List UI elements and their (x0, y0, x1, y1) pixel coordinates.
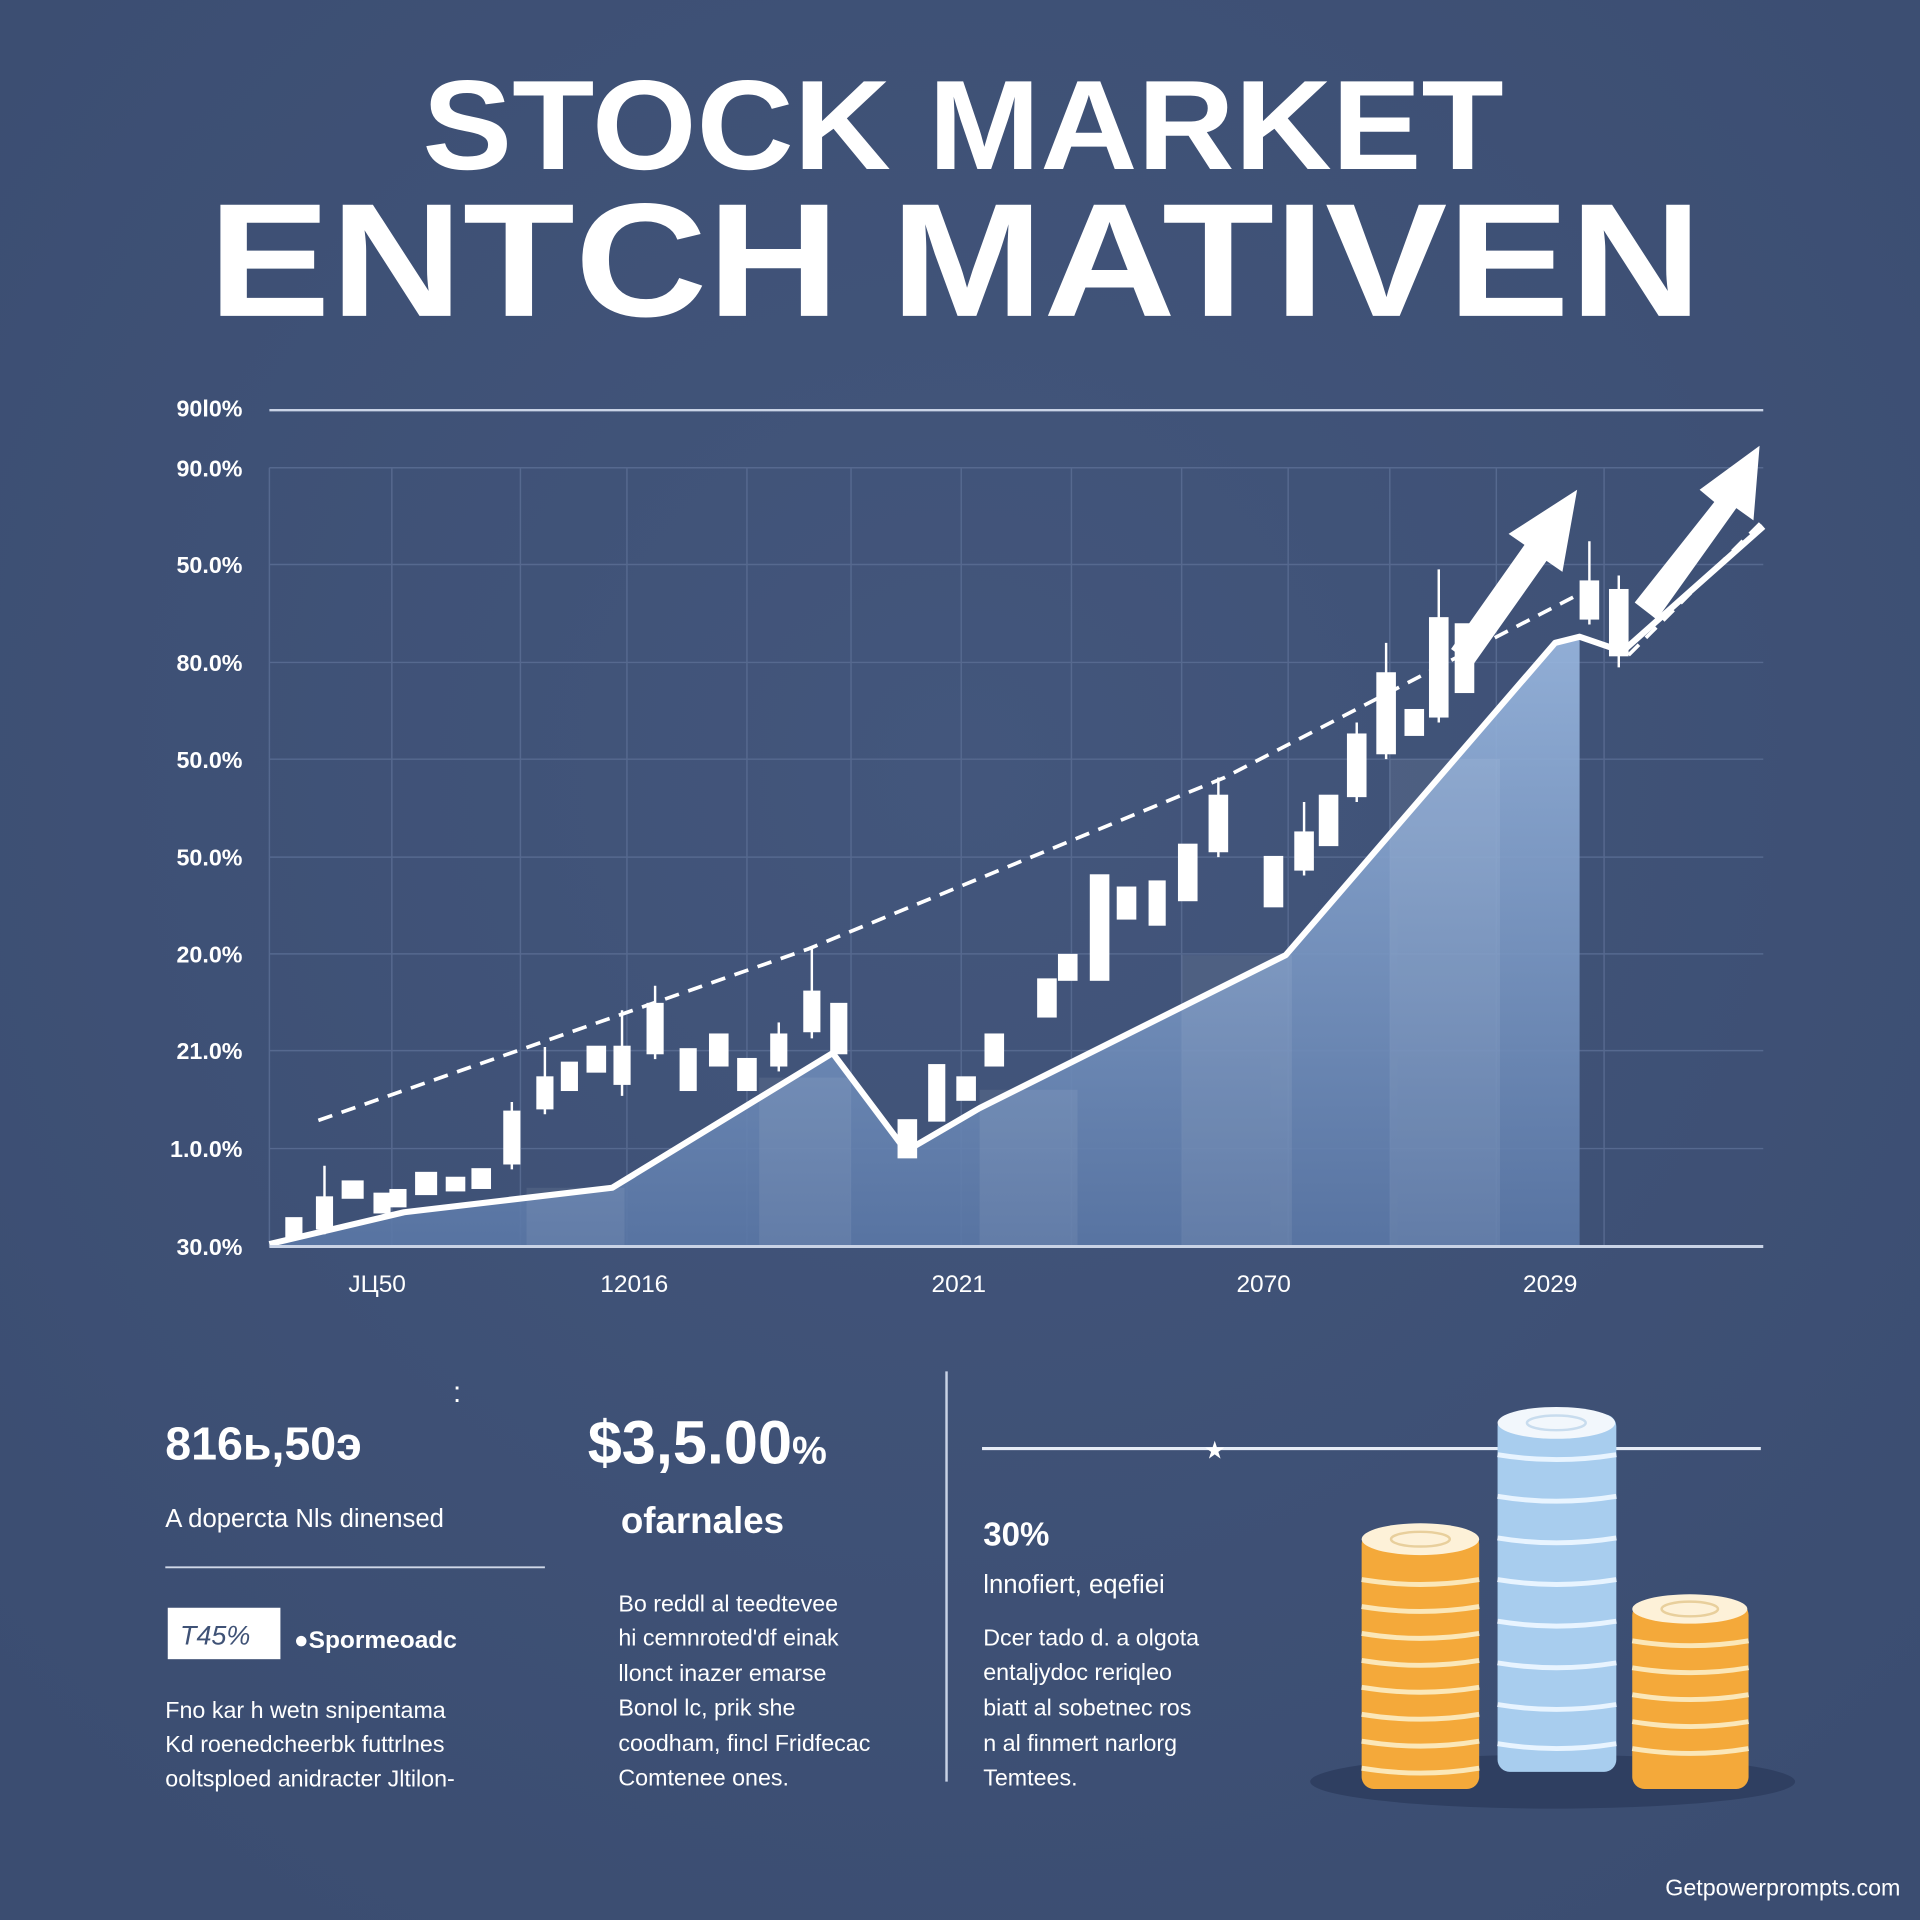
panel: stat 1: 816ь,50э (165, 1418, 362, 1470)
y axis labels: 30.0% (177, 1234, 243, 1260)
panel: stat 2: $3,5.00% (588, 1408, 827, 1476)
panel: stat 3: lnnofiert, eqefiei (983, 1571, 1165, 1599)
blue (1498, 1414, 1616, 1772)
title: ENTCH MATIVEN (208, 171, 1702, 351)
panel: stat 2: Comtenee ones. (618, 1764, 789, 1790)
panel: stat 2: ofarnales (621, 1500, 784, 1541)
y axis labels: 20.0% (177, 941, 243, 967)
panel: stat 3: biatt al sobetnec ros (983, 1695, 1191, 1721)
icon: coin stacks (1310, 1407, 1795, 1809)
panel: stat 1: Fno kar h wetn snipentama (165, 1697, 446, 1723)
y axis labels: 21.0% (177, 1038, 243, 1064)
area (269, 637, 1580, 1247)
y axis labels: 90l0% (177, 395, 243, 421)
x axis labels: 2021 (932, 1271, 986, 1298)
panel: stat 1: Kd roenedcheerbk futtrlnes (165, 1731, 444, 1757)
trend line (269, 527, 1763, 1244)
y axis labels: 1.0.0% (170, 1136, 243, 1162)
left orange (1362, 1532, 1479, 1789)
y axis labels: 50.0% (177, 747, 243, 773)
panel: stat 2: hi cemnroted'df einak (618, 1625, 839, 1651)
title: STOCK MARKET (422, 54, 1504, 196)
panel: stat 2: llonct inazer emarse (618, 1660, 826, 1686)
y axis labels: 50.0% (177, 845, 243, 871)
panel: stat 3: Dcer tado d. a olgota (983, 1625, 1199, 1651)
x axis labels (348, 1271, 1577, 1298)
panel: stat 3 (982, 1437, 1761, 1790)
y axis labels (170, 395, 243, 1260)
y axis labels: 50.0% (177, 552, 243, 578)
right orange (1632, 1603, 1749, 1789)
x axis labels: 2029 (1523, 1271, 1577, 1298)
x axis labels: 12016 (600, 1271, 668, 1298)
panel: stat 3: n al finmert narlorg (983, 1730, 1177, 1756)
panel: stat 1: A dopercta N‌ls dinensed (165, 1505, 444, 1533)
panel: stat 1: : (453, 1376, 461, 1409)
y axis labels: 80.0% (177, 650, 243, 676)
dashed line (318, 594, 1580, 1120)
candlesticks (287, 541, 1627, 1237)
title (208, 54, 1702, 351)
panel: stat 2 (588, 1408, 871, 1790)
x axis labels: JЦ50 (348, 1271, 406, 1298)
panel: stat 2: Bo reddl al teedtevee (618, 1590, 838, 1616)
watermark: Getpowerprompts.com (1665, 1875, 1900, 1901)
chart (170, 395, 1763, 1298)
panel: stat 3: Temtees. (983, 1764, 1078, 1790)
panel: stat 1 (165, 1376, 545, 1792)
panel: stat 1: ooltsploed anidracter Jltilon- (165, 1766, 455, 1792)
panel: stat 3: 30% (983, 1516, 1049, 1553)
panel: stat 2: coodham, fincl Fridfecac (618, 1730, 871, 1756)
arrows (1451, 446, 1760, 665)
x axis labels: 2070 (1236, 1271, 1291, 1298)
panel: stat 3: entaljydoc reriqleo (983, 1659, 1172, 1685)
panel: stat 2: Bonol lc, prik she (618, 1695, 795, 1721)
panel: stat 1: T45% (180, 1620, 250, 1650)
panel: stat 3: ★ (1204, 1437, 1226, 1464)
panel: stat 1: ●Spormeoadc (294, 1627, 457, 1654)
y axis labels: 90.0% (177, 455, 243, 481)
